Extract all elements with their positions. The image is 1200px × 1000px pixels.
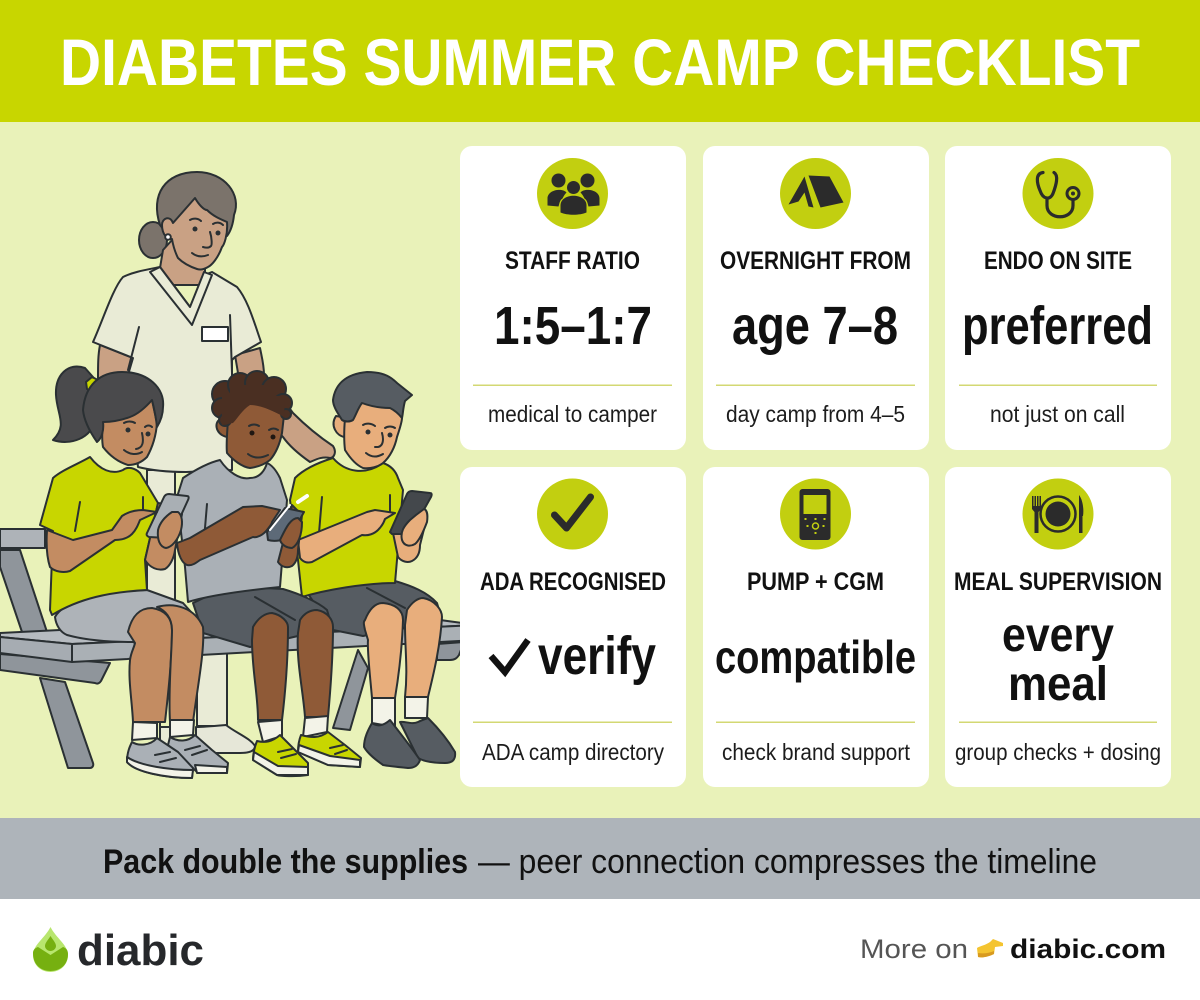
label: MEAL SUPERVISION [954, 568, 1162, 596]
label: ADA RECOGNISED [480, 568, 666, 596]
value: meal [1008, 658, 1108, 711]
icon: pointing hand [977, 939, 1003, 957]
card: overnight from [703, 146, 929, 450]
note: group checks + dosing [955, 739, 1161, 765]
label: STAFF RATIO [505, 247, 640, 275]
label: PUMP + CGM [747, 568, 884, 596]
takeaway text: Pack double the supplies [103, 843, 468, 881]
icon: check mark [537, 478, 608, 550]
icon: plate and cutlery [1022, 478, 1094, 550]
note: ADA camp directory [482, 739, 664, 765]
card: meal supervision [945, 467, 1171, 787]
header banner [0, 0, 1200, 122]
takeaway text: — peer connection compresses the timeline [478, 843, 1097, 881]
camper: girl [40, 367, 228, 778]
note: check brand support [722, 739, 911, 765]
bottom takeaway band [0, 818, 1200, 899]
value: age 7–8 [732, 296, 898, 356]
card: ADA recognised [460, 467, 686, 787]
illustration: nurse and three campers on a bench [0, 172, 477, 778]
card: staff ratio [460, 146, 686, 450]
icon: insulin pump [780, 478, 851, 550]
note: not just on call [990, 401, 1125, 427]
icon: tent [780, 158, 851, 229]
value: verify [538, 626, 656, 686]
note: medical to camper [488, 401, 657, 427]
link: more on diabic.com: diabic.com [1010, 934, 1166, 964]
card: endo on site [945, 146, 1171, 450]
footer [0, 899, 1200, 1000]
icon: stethoscope [1022, 158, 1094, 229]
value [491, 626, 656, 686]
nurse [93, 172, 335, 753]
nurse hair bun [139, 222, 167, 258]
note: day camp from 4–5 [726, 401, 905, 427]
label: ENDO ON SITE [984, 247, 1132, 275]
link: more on diabic.com: More on [860, 934, 968, 964]
boy phone [390, 491, 432, 534]
card: pump + CGM [703, 467, 929, 787]
takeaway text [103, 843, 1097, 881]
value: 1:5–1:7 [494, 296, 652, 356]
icon: group of people [537, 158, 608, 229]
picnic bench [0, 529, 477, 768]
label: OVERNIGHT FROM [720, 247, 911, 275]
value: every [1002, 609, 1114, 662]
value [1002, 609, 1114, 711]
girl phone [147, 494, 189, 538]
value: compatible [715, 631, 916, 683]
logo: diabic [77, 926, 204, 975]
camper: boy in grey shirt [177, 371, 361, 776]
link: more on diabic.com [860, 934, 1166, 964]
camper: boy in yellow shirt [290, 372, 455, 768]
value: preferred [962, 296, 1153, 356]
boy meter [267, 508, 304, 541]
